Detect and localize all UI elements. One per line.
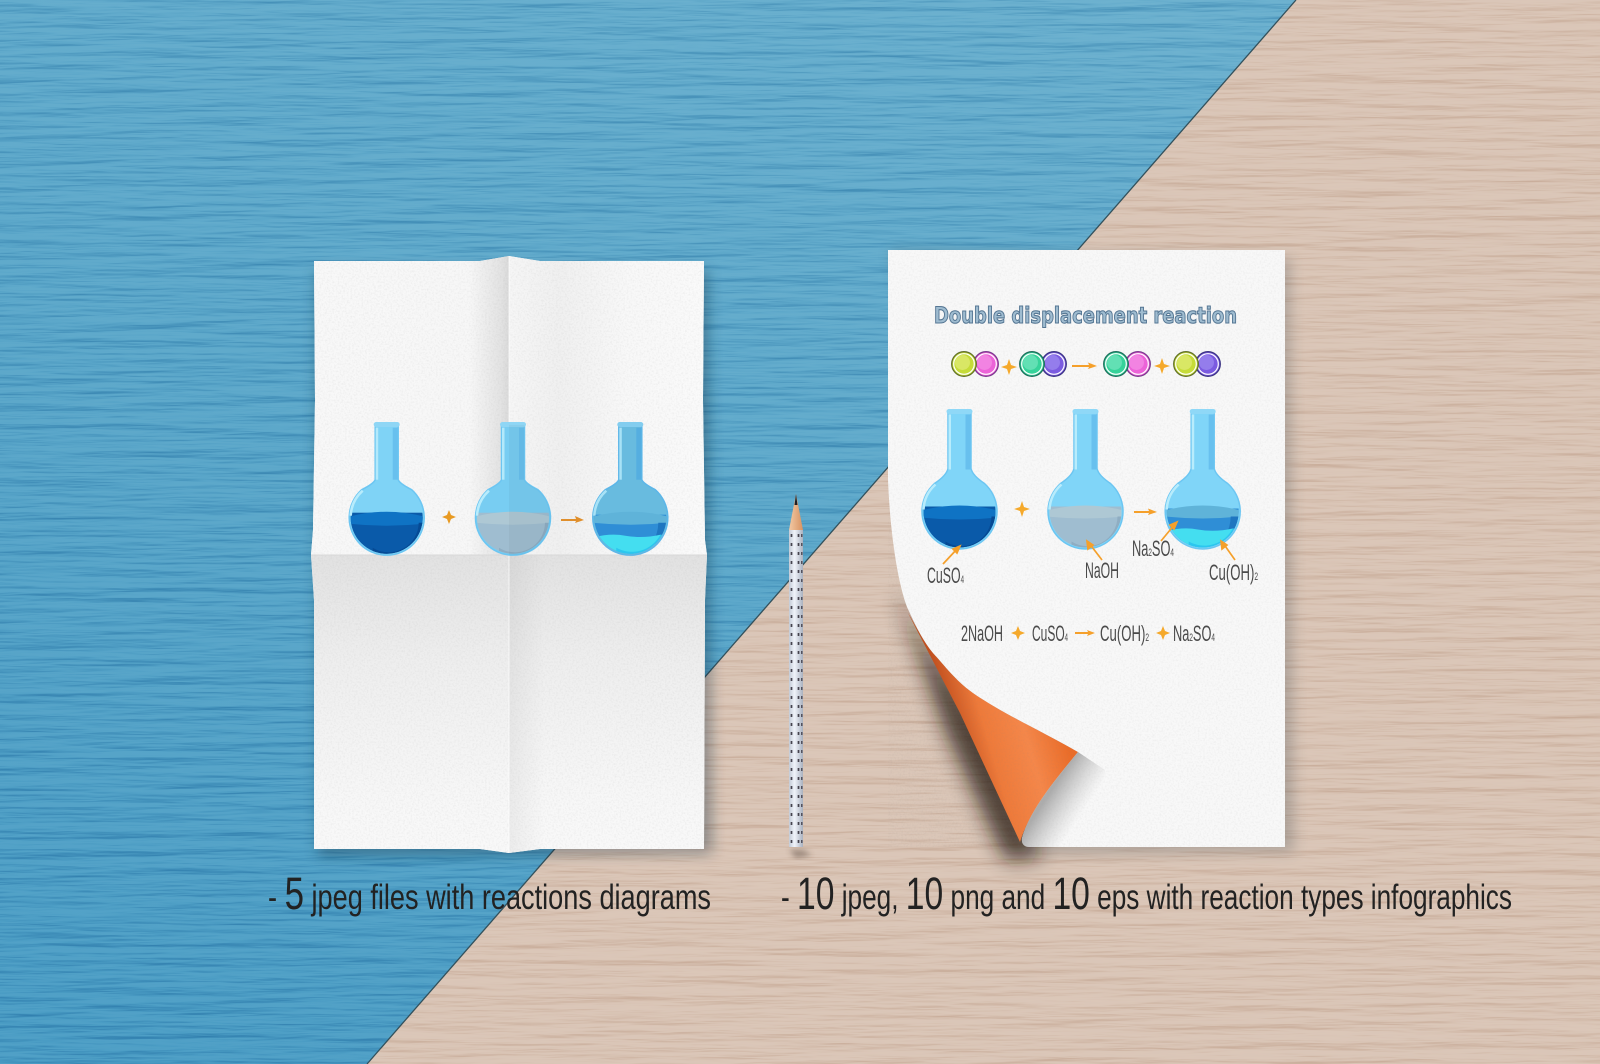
diagonal edge line	[367, 0, 1296, 1064]
plus sign	[1001, 359, 1017, 375]
caption: left: - 5 jpeg files with reactions diagrams	[268, 868, 711, 919]
plus sign	[1014, 501, 1030, 517]
reaction arrow	[561, 516, 584, 523]
label: CuSO4: CuSO4	[927, 563, 964, 588]
molecule: green and purple	[1020, 352, 1066, 376]
molecule equation row	[952, 352, 1220, 376]
flask: CuSO4 (small sheet)	[349, 422, 425, 558]
plus sign	[1154, 358, 1170, 374]
curl cast shadow	[896, 590, 1040, 860]
flask: CuSO4	[922, 409, 998, 552]
flask: products (small sheet)	[592, 422, 668, 560]
flask: products	[1165, 409, 1241, 554]
molecule: yellow and magenta	[952, 352, 998, 376]
label: Na2SO4: Na2SO4	[1132, 536, 1174, 561]
molecule: yellow and purple	[1174, 352, 1220, 376]
label arrows	[943, 522, 1235, 564]
reaction arrow	[1072, 362, 1097, 369]
title: Double displacement reaction	[934, 304, 1237, 329]
panel: curled paper with double displacement infographic	[888, 250, 1294, 860]
chemical equation: 2NaOH	[961, 621, 1003, 646]
chemical equation: Na2SO4	[1173, 621, 1215, 646]
molecule: green and magenta	[1104, 352, 1150, 376]
reaction arrow	[1134, 508, 1157, 515]
paper sheet	[888, 250, 1285, 847]
plus sign	[442, 510, 456, 524]
label: NaOH: NaOH	[1085, 558, 1119, 583]
panel: folded paper with reaction diagram	[310, 250, 712, 860]
orange curled corner	[908, 613, 1078, 842]
pencil	[789, 494, 812, 858]
flask: NaOH	[1048, 409, 1124, 552]
flask: NaOH (small sheet)	[475, 422, 555, 558]
chemical equation	[961, 621, 1215, 646]
background: beige wood panel	[367, 0, 1600, 1064]
chemical equation: CuSO4	[1032, 621, 1068, 646]
chemical equation: Cu(OH)2	[1100, 621, 1149, 646]
label: Cu(OH)2: Cu(OH)2	[1209, 560, 1258, 585]
